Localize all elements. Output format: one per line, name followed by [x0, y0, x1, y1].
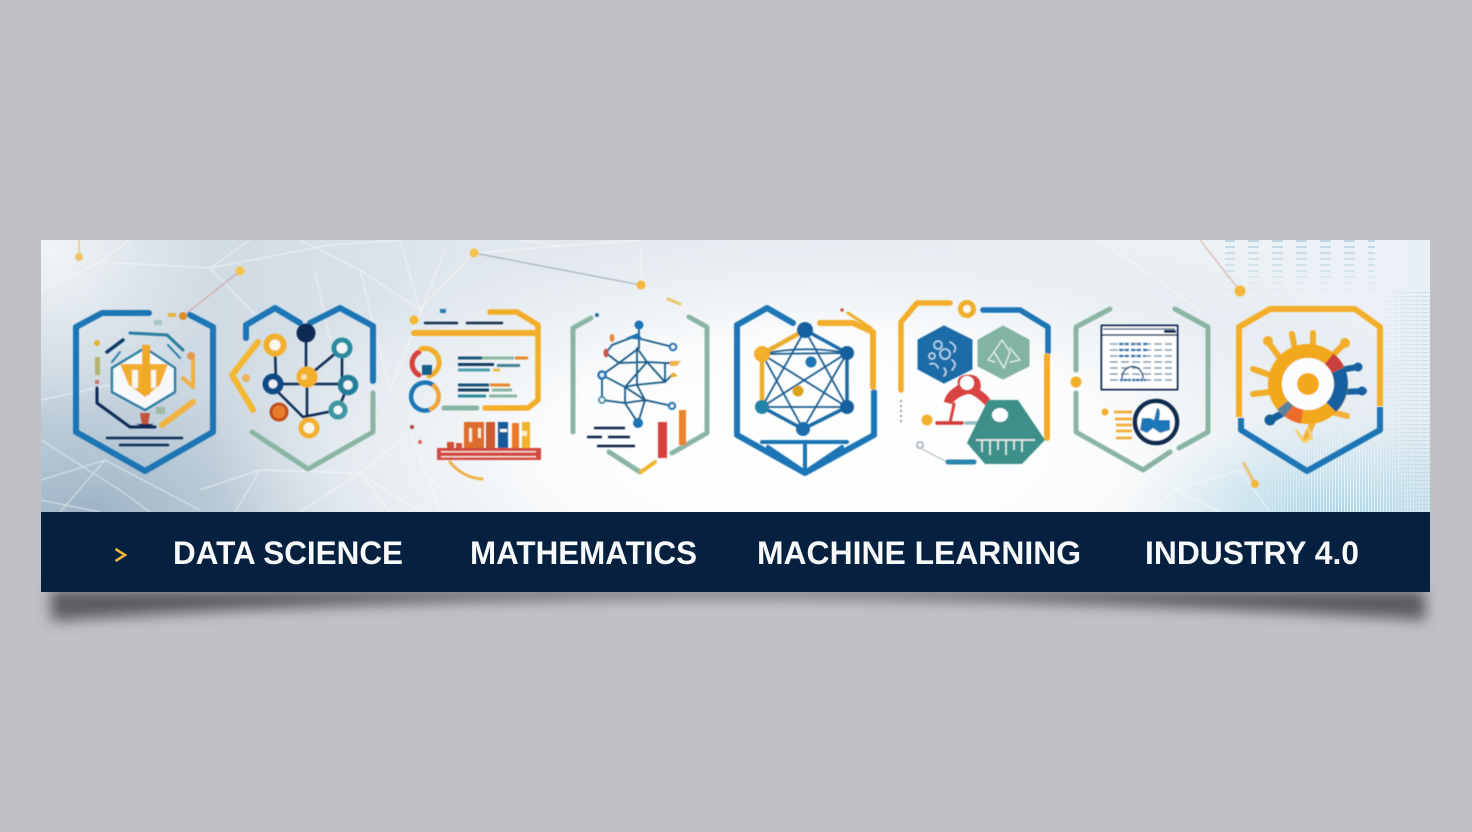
polyhedron nodes — [754, 322, 854, 436]
label: machine learning: MACHINE LEARNING — [757, 535, 1081, 571]
panel: navy caption bar — [41, 512, 1430, 592]
split hexagon frame — [232, 308, 373, 469]
icon 7: dashboard window hexagon — [1070, 309, 1208, 470]
donut charts — [411, 348, 439, 411]
banner shadow — [50, 590, 1426, 621]
star mesh lines — [762, 330, 847, 429]
circular badge — [1135, 401, 1177, 443]
circuit traces — [97, 333, 193, 427]
yellow list — [1102, 408, 1132, 438]
mini bars — [658, 410, 686, 458]
gold and blue frame — [1239, 309, 1380, 471]
baseline bars — [107, 438, 182, 445]
teal hexagon frame — [1070, 309, 1208, 470]
mesh edges — [602, 325, 677, 423]
icon 1: data science hexagon — [76, 312, 213, 471]
teal ruler block — [967, 400, 1045, 464]
blue hexagon module — [918, 326, 972, 383]
curved connector — [450, 462, 482, 479]
text rows — [458, 358, 528, 396]
text lines — [587, 428, 635, 446]
blue and gold frame — [737, 308, 874, 473]
small parts — [94, 312, 195, 428]
data window — [1102, 326, 1178, 390]
icon 8: industry gear hexagon — [1239, 309, 1380, 471]
green hexagon module — [978, 326, 1029, 379]
inner hexagon — [112, 348, 175, 410]
gear hub — [1282, 358, 1334, 410]
icon 6: machine learning modules — [901, 302, 1048, 464]
graph nodes — [242, 324, 356, 436]
teal hexagon frame — [573, 299, 707, 472]
yellow window frame — [485, 312, 538, 408]
stand — [762, 442, 847, 472]
panel: illustrated banner background — [41, 240, 1430, 512]
gear splash — [1296, 428, 1312, 442]
graph edges — [273, 333, 348, 417]
outer polygon — [762, 330, 847, 429]
split frame — [901, 302, 1048, 438]
mesh nodes — [598, 320, 681, 428]
blue hexagon frame — [76, 313, 213, 471]
icon 4: neural mesh hexagon — [573, 299, 707, 472]
bar chart — [410, 422, 541, 460]
red arm joint — [937, 375, 992, 423]
label: data science: DATA SCIENCE — [173, 535, 403, 571]
label: industry 4.0: INDUSTRY 4.0 — [1145, 535, 1359, 571]
window title band — [410, 309, 535, 408]
icon 3: dashboard and bar chart — [410, 309, 541, 479]
gear teeth — [1253, 333, 1366, 440]
icon 5: polyhedron network hexagon — [737, 308, 874, 473]
small elements — [901, 400, 974, 462]
icon 2: network graph hexagon — [232, 308, 373, 469]
golden shield — [120, 345, 168, 397]
gear ring segments — [1275, 351, 1341, 417]
connector nodes and lines — [75, 240, 1259, 488]
label: mathematics: MATHEMATICS — [470, 535, 697, 571]
icon: chevron — [116, 549, 125, 561]
